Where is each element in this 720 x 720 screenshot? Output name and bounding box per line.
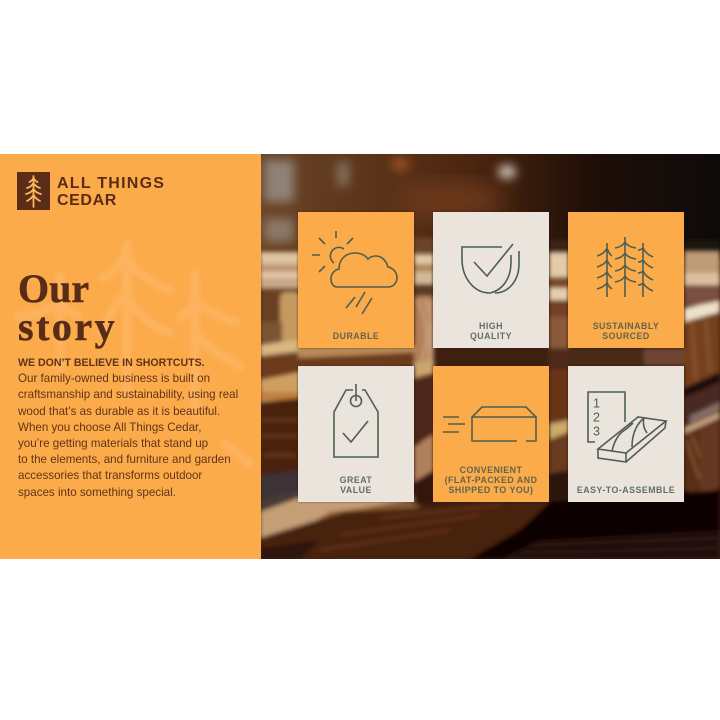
- story text: WE DON’T BELIEVE IN SHORTCUTS.: [18, 357, 205, 369]
- story text: you’re getting materials that stand up: [18, 437, 208, 450]
- story text: When you choose All Things Cedar,: [18, 421, 201, 434]
- label: SUSTAINABLY: [593, 321, 659, 331]
- label: DURABLE: [333, 331, 379, 341]
- label: CONVENIENT: [460, 465, 522, 475]
- logo icon: tree: [17, 172, 50, 210]
- story text: to the elements, and furniture and garden: [18, 453, 231, 466]
- right strip: [684, 240, 720, 252]
- label: [470, 321, 512, 341]
- card: easy to assemble: [568, 366, 684, 502]
- story text: [18, 357, 238, 499]
- centre strip 2: [549, 240, 569, 253]
- story text: accessories that transforms outdoor: [18, 469, 202, 482]
- label: [445, 465, 537, 495]
- logo: [17, 172, 165, 210]
- icon: steps and plank: 1: [593, 396, 600, 410]
- label: QUALITY: [470, 331, 512, 341]
- heading: Our: [18, 266, 89, 310]
- panel: brand story: [0, 154, 261, 559]
- icon: steps and plank: 3: [593, 424, 600, 438]
- row gap right: [568, 348, 644, 366]
- label: GREAT: [340, 475, 372, 485]
- icon: shield with check: [461, 244, 520, 294]
- story text: spaces into something special.: [18, 486, 176, 499]
- heading: [18, 266, 117, 349]
- icon: steps and plank: [587, 391, 668, 463]
- story text: Our family-owned business is built on: [18, 372, 210, 385]
- left strip: [260, 252, 300, 264]
- heading: story: [18, 304, 117, 348]
- wood photo background: [261, 154, 720, 559]
- story text: craftsmanship and sustainability, using real: [18, 388, 238, 401]
- label: [593, 321, 659, 341]
- logo wordmark: [57, 175, 165, 208]
- label: HIGH: [479, 321, 503, 331]
- card: sustainably sourced: [568, 212, 684, 348]
- label: SOURCED: [602, 331, 650, 341]
- label: SHIPPED TO YOU): [449, 485, 533, 495]
- card: high quality: [433, 212, 549, 348]
- icon: steps and plank: 2: [593, 410, 600, 424]
- card: durable: [298, 212, 414, 348]
- bottom right: [470, 490, 720, 559]
- centre strip 1: [414, 238, 434, 252]
- label: VALUE: [340, 485, 372, 495]
- icon: three trees: [596, 237, 654, 297]
- label: (FLAT-PACKED AND: [445, 475, 537, 485]
- watermark trees: [14, 240, 254, 468]
- card: convenient: [433, 366, 549, 502]
- card: great value: [298, 366, 414, 502]
- label: EASY-TO-ASSEMBLE: [577, 485, 675, 495]
- logo wordmark: ALL THINGS: [57, 175, 165, 192]
- icon: moving package: [443, 406, 537, 442]
- logo wordmark: CEDAR: [57, 192, 117, 208]
- label: [340, 475, 372, 495]
- icon: price tag with check: [333, 384, 379, 458]
- story text: wood that’s as durable as it is beautiful.: [18, 405, 220, 418]
- icon: sun and rain cloud: [312, 231, 398, 314]
